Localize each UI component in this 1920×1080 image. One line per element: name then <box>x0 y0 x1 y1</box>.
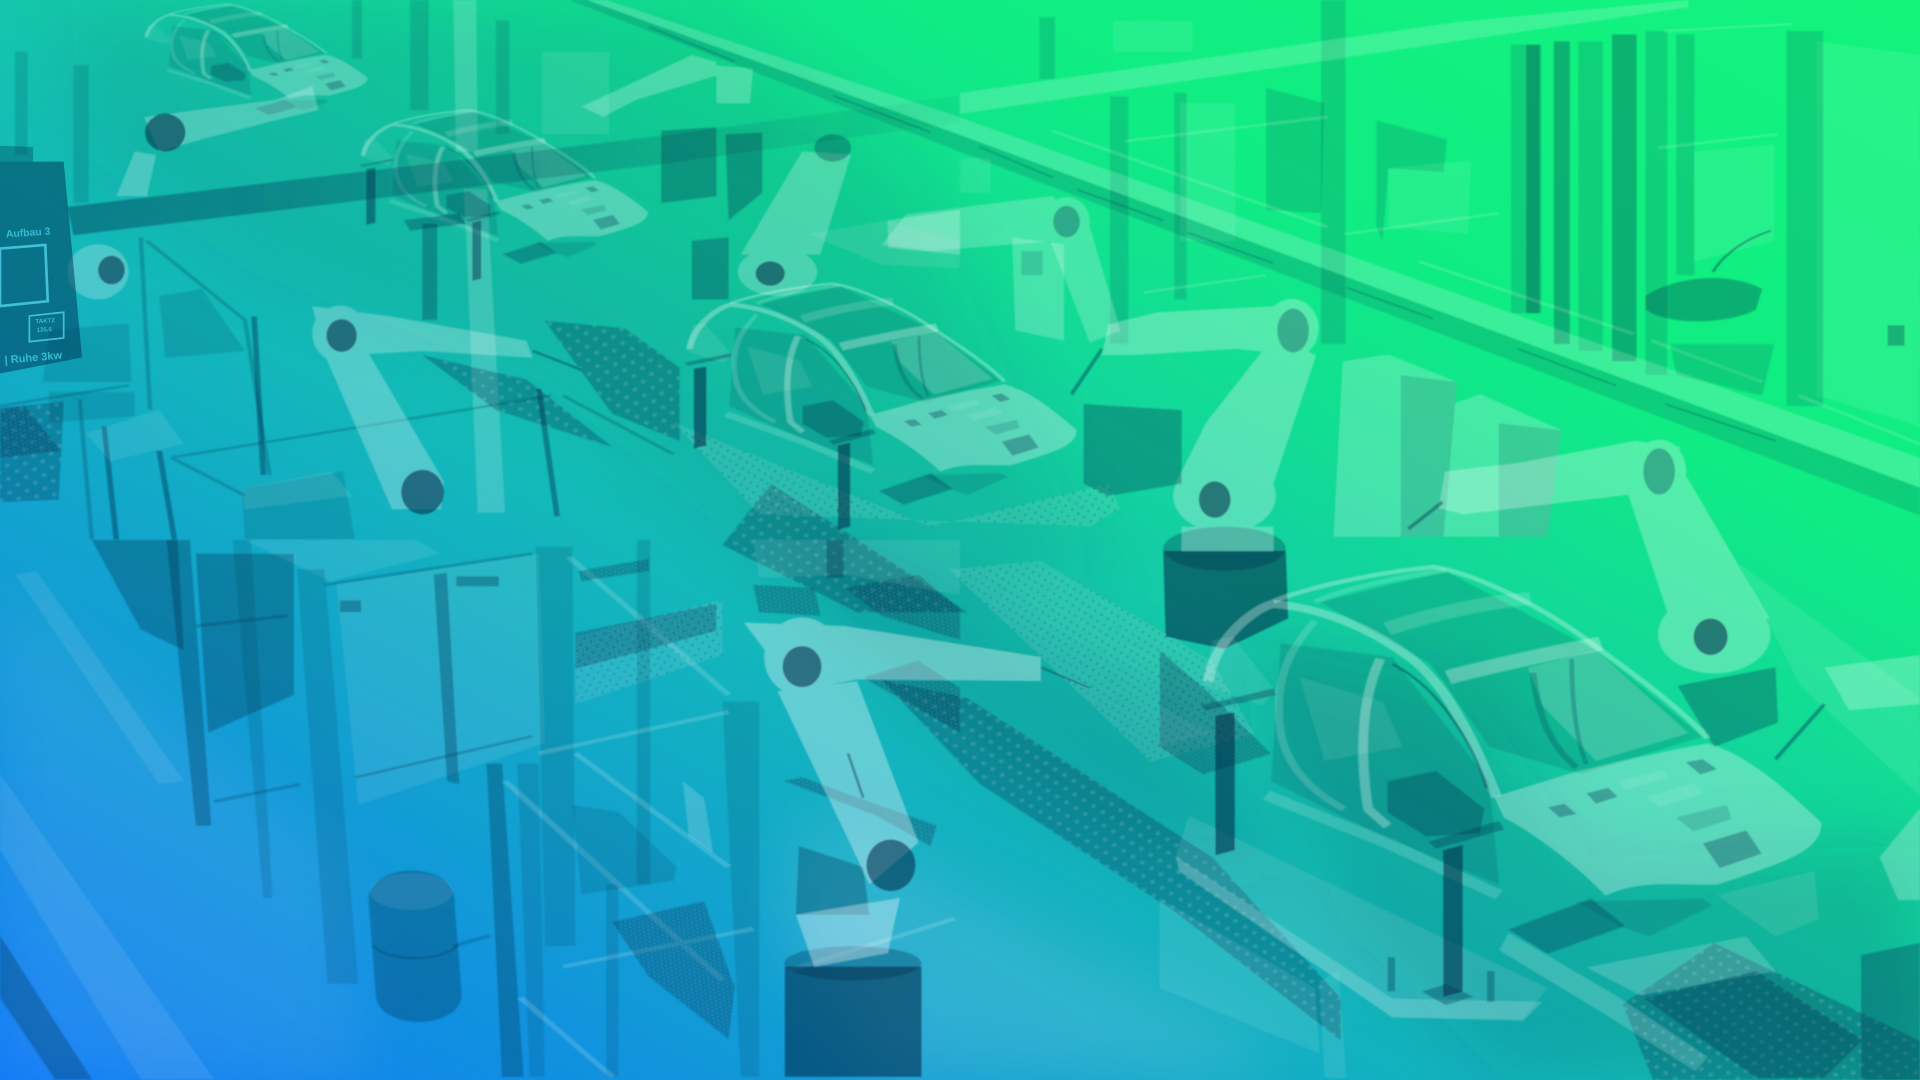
teal table corner <box>753 540 960 595</box>
posts <box>960 0 1346 344</box>
cabinet pair, right <box>1012 237 1561 537</box>
perforated steps <box>576 604 716 669</box>
info sign, left <box>0 146 82 373</box>
wall panel right <box>1817 41 1920 427</box>
robot base drum <box>785 967 921 1077</box>
overhead cross beam <box>67 0 1689 235</box>
cabinet, back left <box>1266 88 1324 213</box>
cabinet doors <box>337 554 545 805</box>
car body: middle <box>673 284 1120 529</box>
robot arm: bottom right edge <box>1739 563 1920 1080</box>
car body: far <box>144 4 368 115</box>
robot arm: front centre, left <box>242 306 582 540</box>
bright bay <box>1695 145 1774 262</box>
floor walkway and floor stripes <box>0 571 214 1080</box>
guard fence and shelving, left <box>0 237 673 540</box>
car part beyond fence <box>1646 278 1762 321</box>
robot arm: upper middle and left machinery <box>43 55 960 382</box>
cabinet top, upper <box>245 540 441 581</box>
warning sign <box>683 781 713 853</box>
sign stand shadow <box>49 392 135 422</box>
sign footer: | Ruhe 3kw <box>4 350 63 367</box>
background column <box>15 0 609 513</box>
car body: front large <box>1160 567 1863 1078</box>
upper right structure: walls, columns, cabinets <box>960 0 1920 444</box>
panel on column <box>1012 237 1064 341</box>
rails <box>505 557 955 1077</box>
sign screen frame <box>0 245 48 306</box>
sign title: Aufbau 3 <box>6 226 51 241</box>
sign readout: 126,6 <box>36 326 53 334</box>
robot arm: centre right <box>1071 299 1319 649</box>
stair block <box>572 805 677 894</box>
car body: distant middle <box>360 110 648 281</box>
large electrical cabinet and lower fence <box>92 540 960 1077</box>
posts <box>167 540 211 826</box>
thin rails <box>1052 24 1920 444</box>
oil barrel <box>369 871 462 1022</box>
robot arm: front centre <box>744 617 1090 1077</box>
robot motor <box>796 846 869 915</box>
sign readout: TAKTZ <box>35 317 55 325</box>
robot arm: upper right of middle <box>882 196 1182 496</box>
dark column group <box>1511 31 1823 406</box>
shelf interior <box>92 540 184 650</box>
sign readout <box>29 312 64 342</box>
main overhead beam, diagonal <box>569 0 1920 516</box>
perforated conveyor track <box>0 321 1920 1080</box>
cabinet, back middle <box>1376 120 1447 241</box>
robot arm: far right <box>1408 440 1778 747</box>
robot base <box>1163 551 1288 649</box>
